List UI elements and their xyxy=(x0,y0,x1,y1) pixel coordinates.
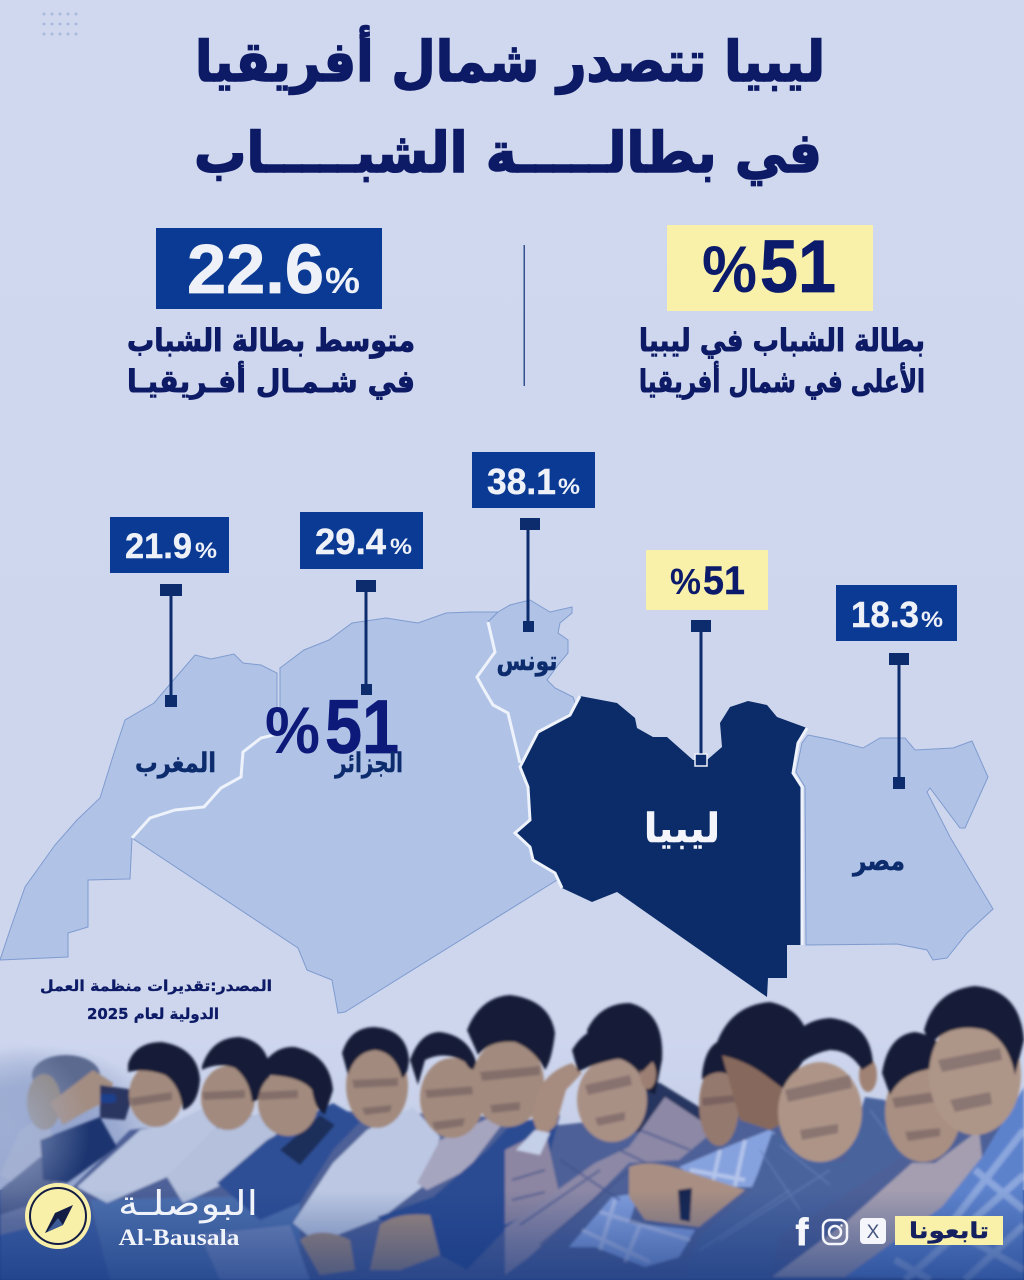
follow button: تابعونا xyxy=(909,1219,989,1244)
stat caption: بطالة الشباب في ليبيا xyxy=(639,323,925,359)
label: Libya: ليبيا xyxy=(644,806,720,852)
photo: row of young men sitting xyxy=(0,986,1024,1280)
value box: Egypt 18.3%: % xyxy=(921,607,943,632)
man 9 in blue check xyxy=(679,1040,775,1187)
connector: Libya value xyxy=(691,620,711,766)
label: Egypt: مصر xyxy=(851,846,905,877)
value box: Libya 51%: 51 xyxy=(703,559,745,603)
connector: Morocco value xyxy=(160,584,182,707)
man behind, dark jacket xyxy=(587,1003,709,1140)
social follow strip xyxy=(796,1212,1003,1254)
icon: X: X xyxy=(867,1222,880,1243)
stat caption: الأعلى في شمال أفريقيا xyxy=(639,361,925,400)
map: Morocco xyxy=(0,654,286,960)
value box: Algeria 29.4%: % xyxy=(390,534,412,559)
connector: Tunisia value xyxy=(520,518,540,632)
logo: Al-Bausala compass and wordmark: Al-Bausala xyxy=(118,1225,240,1250)
stat caption xyxy=(127,323,415,400)
value box: Morocco 21.9% xyxy=(110,517,229,573)
value box: Tunisia 38.1%: % xyxy=(558,474,580,499)
man 13 in blue plaid xyxy=(845,986,1024,1280)
value box: Libya 51% xyxy=(646,550,768,610)
man 8 in plaid shirt xyxy=(505,1026,715,1275)
icon: facebook: f xyxy=(796,1212,809,1254)
label: Morocco: المغرب xyxy=(135,748,216,779)
connector: Algeria value xyxy=(356,580,376,695)
map: Libya white west and east edge xyxy=(515,696,807,945)
big figure over Algeria: % xyxy=(265,693,320,767)
yellow stat box xyxy=(667,225,873,311)
map: Algeria xyxy=(132,612,557,1013)
stat caption xyxy=(639,323,925,400)
stat caption: متوسط بطالة الشباب xyxy=(127,323,415,359)
value box: Tunisia 38.1%: 38.1 xyxy=(487,461,556,502)
value box: Egypt 18.3%: 18.3 xyxy=(851,594,919,635)
icon: X xyxy=(860,1218,886,1244)
man 12 in beige knit xyxy=(772,1032,982,1277)
man 7 in blue jacket xyxy=(300,995,560,1275)
map: Libya xyxy=(515,696,807,997)
blue stat box: % xyxy=(325,260,360,301)
follow button xyxy=(895,1216,1003,1245)
big figure over Algeria: 51 xyxy=(325,685,399,770)
value box: Libya 51%: % xyxy=(670,561,701,602)
value box: Algeria 29.4% xyxy=(300,512,423,569)
map: Egypt xyxy=(796,735,993,960)
source note xyxy=(40,977,272,1023)
value box: Algeria 29.4%: 29.4 xyxy=(315,521,386,562)
yellow stat box: 51 xyxy=(760,225,836,308)
map of North Africa xyxy=(0,600,993,1013)
man 2 xyxy=(77,1042,217,1203)
stat: Libya 51 percent xyxy=(639,225,925,400)
source note: المصدر:تقديرات منظمة العمل xyxy=(40,977,272,995)
icon: compass xyxy=(25,1183,91,1249)
blue stat box: 22.6 xyxy=(187,230,324,308)
stat: North Africa average xyxy=(127,228,415,400)
logo: Al-Bausala compass and wordmark xyxy=(25,1183,258,1250)
man 10 seen from side xyxy=(716,1002,810,1130)
body mass behind the row xyxy=(0,1100,1024,1280)
value box: Morocco 21.9%: 21.9 xyxy=(125,527,192,566)
label: Tunisia: تونس xyxy=(496,646,558,677)
man 4 in blue hoodie xyxy=(217,1047,362,1220)
icon: instagram xyxy=(823,1220,847,1244)
map: Tunisia xyxy=(477,600,575,763)
man 5 in light shirt xyxy=(293,1027,440,1243)
title: في بطالـــــة الشبـــــاب xyxy=(194,121,822,186)
value box: Egypt 18.3% xyxy=(836,585,957,641)
big figure over Algeria xyxy=(265,685,399,770)
source note: الدولية لعام 2025 xyxy=(87,1005,219,1023)
yellow stat box: % xyxy=(702,232,757,306)
man 6 in beige shirt xyxy=(410,1032,503,1190)
title: ليبيا تتصدر شمال أفريقيا xyxy=(195,25,825,95)
label: Algeria: الجزائر xyxy=(334,748,403,779)
value box: Tunisia 38.1% xyxy=(472,452,595,508)
logo: Al-Bausala compass and wordmark: البوصلـة xyxy=(118,1184,258,1224)
map: white borders xyxy=(132,622,520,838)
connector: Egypt value xyxy=(889,653,909,789)
man 3 xyxy=(167,1037,277,1203)
man 1 faded with hand on head xyxy=(0,1055,135,1215)
blue stat box xyxy=(156,228,382,309)
decorative dots xyxy=(42,12,78,36)
legs and lower shadows xyxy=(0,1180,310,1280)
value box: Morocco 21.9%: % xyxy=(195,538,217,563)
man 11 in knit sweater xyxy=(629,1018,912,1277)
stat caption: في شـمـال أفـريقيـا xyxy=(127,361,415,400)
title xyxy=(194,25,825,186)
